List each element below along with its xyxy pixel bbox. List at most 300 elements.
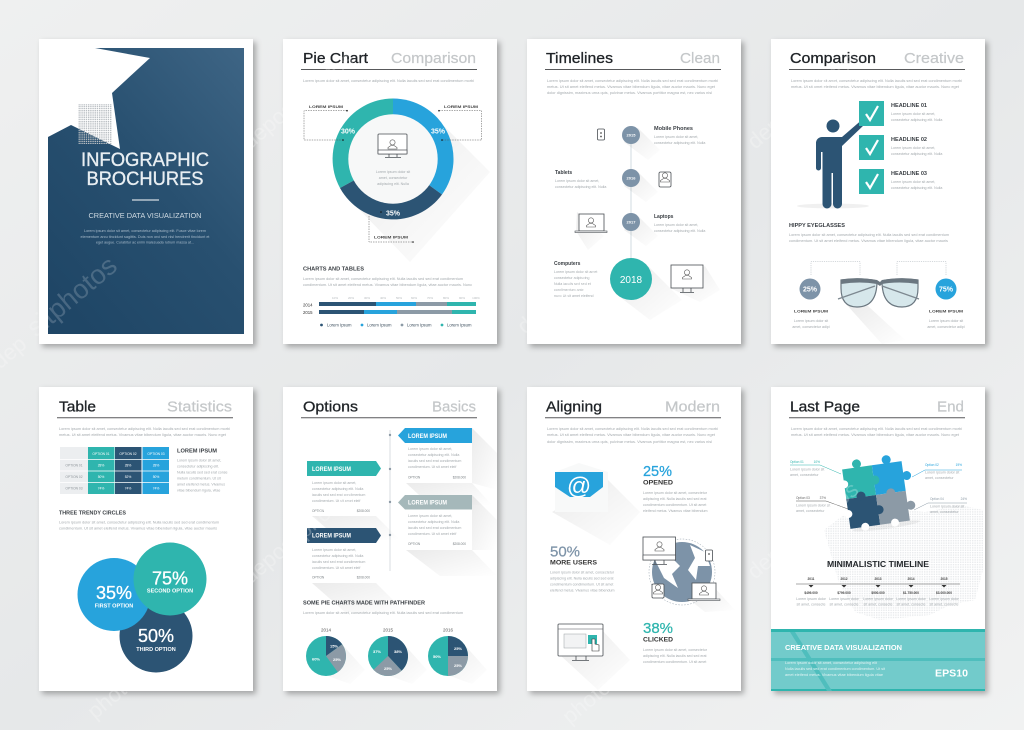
- glasses: [838, 278, 919, 344]
- stat 25 percent: Lorem ipsum dolor sit amet, consectetur: [643, 491, 708, 495]
- cover title: INFOGRAPHIC: [81, 150, 209, 171]
- stat 50 percent: Lorem ipsum dolor sit amet, consectetur: [550, 570, 615, 574]
- intro text: metus. Ut sit amet eleifend metus. Vivamus vitae bibendum ligula, vitae auctor mauris. Nunc eget: [59, 433, 226, 437]
- stat 25 percent: adipiscing elit. Nulla iaculis sed sed erat: [643, 497, 707, 501]
- label: computers: Lorem ipsum dolor sit amet: [554, 270, 597, 274]
- minimalistic timeline: $3.000.000: [936, 591, 952, 595]
- headline 01: consectetur adipiscing elit. Nulla: [891, 118, 942, 122]
- option card: gray: OPTION: [408, 542, 421, 546]
- stat 50 percent: MORE USERS: [550, 560, 598, 566]
- data table: 74%: [125, 486, 131, 490]
- circle 50 percent: 50%: [138, 626, 174, 646]
- circle 50 percent: [120, 600, 192, 672]
- option card: gray: [398, 495, 472, 550]
- label: computers: [554, 261, 597, 298]
- option card: dark: $208.000: [357, 576, 370, 580]
- minimalistic timeline: $900.000: [871, 591, 885, 595]
- stat 25 percent: OPENED: [643, 480, 673, 486]
- sub text: Lorem ipsum dolor sit amet, consectetur adipiscing elit. Nulla iaculis sed sed erat condimentum: [303, 277, 463, 281]
- pie 2015: [368, 628, 427, 684]
- option card: gray: Lorem ipsum dolor sit amet,: [408, 514, 452, 518]
- 75 percent circle: [936, 278, 956, 300]
- heading: Basics: [432, 398, 476, 416]
- heading: [301, 50, 477, 70]
- right caption: LOREM IPSUM: [929, 308, 964, 314]
- panel: timelines: [527, 39, 741, 344]
- icon: tablet: [659, 172, 671, 187]
- stat 38 percent: condimentum condimentum. Ut sit amet: [643, 660, 706, 664]
- label: tablets: Lorem ipsum dolor sit amet,: [555, 179, 599, 183]
- center rail: [389, 430, 391, 571]
- heading: [789, 398, 965, 418]
- heading: Pie Chart: [303, 50, 369, 67]
- intro text: Lorem ipsum dolor sit amet, consectetur adipiscing elit. Nulla iaculis sed sed erat condimentum morbi: [791, 427, 962, 431]
- data table: [60, 447, 169, 494]
- option card: teal: OPTION: [312, 509, 325, 513]
- side text: metum condimentum. Ut sit: [177, 476, 221, 480]
- option card: blue: consectetur adipiscing elit. Nulla: [408, 453, 459, 457]
- timeline node 2016: 2016: [627, 176, 636, 180]
- stat 50 percent: 50%: [550, 544, 580, 560]
- option card: teal: condimentum. Ut sit amet eleif: [312, 499, 360, 503]
- minimalistic timeline: Lorem ipsum dolor: [796, 597, 827, 601]
- pie 2016: [428, 628, 487, 684]
- stacked bar chart: 90%: [459, 296, 465, 300]
- icon: globe with devices: [643, 537, 735, 612]
- subheading: SOME PIE CHARTS MADE WITH PATHFINDER: [303, 600, 425, 606]
- intro text: dolor dignissim, maximus urna quis, pulvinar metus. Vivamus porttitor magna est, nec varius nisl: [547, 440, 712, 444]
- pie 2014: 15%: [330, 644, 338, 648]
- cover subtitle: CREATIVE DATA VISUALIZATION: [88, 213, 202, 220]
- pie 2014: 2014: [321, 628, 332, 632]
- banner text: Nulla iaculis sed sed erat condimentum condimentum. Ut sit: [785, 667, 885, 671]
- stacked bar chart: 100%: [472, 296, 480, 300]
- banner text: amet eleifend metus. Vivamus vitae bibendum ligula vitae: [785, 673, 883, 677]
- white star shape: [48, 48, 150, 149]
- minimalistic timeline: $499.000: [804, 591, 818, 595]
- minimalistic timeline: 2013: [874, 577, 882, 581]
- data table: OPTION 03: [65, 486, 83, 490]
- data table: OPTION 01: [92, 452, 110, 456]
- icon: email envelope: [552, 463, 640, 545]
- option card: gray: consectetur adipiscing elit. Nulla: [408, 520, 459, 524]
- option card: gray: iaculis sed sed erat condimentum: [408, 526, 461, 530]
- option card: blue: $208.000: [453, 476, 466, 480]
- option card: blue: Lorem ipsum dolor sit amet,: [408, 447, 452, 451]
- pie 2014: [306, 628, 365, 684]
- heading: [301, 398, 477, 418]
- minimalistic timeline: $799.000: [837, 591, 851, 595]
- cover title: [81, 150, 209, 190]
- heading: Timelines: [546, 50, 613, 67]
- subheading: CHARTS AND TABLES: [303, 266, 364, 272]
- checkbox 1: [859, 101, 884, 126]
- data table: 28%: [125, 464, 131, 468]
- data table: 50%: [153, 475, 159, 479]
- timeline node 2016: [622, 169, 658, 202]
- panel: aligning: [527, 387, 741, 691]
- minimalistic timeline: sit amet, consecte: [797, 602, 825, 606]
- side text: consectetur adipiscing elit.: [177, 464, 219, 468]
- intro text: metus. Ut sit amet eleifend metus. Vivamus vitae bibendum ligula, vitae auctor mauris. Nunc eget: [791, 85, 959, 89]
- label: laptops: [654, 214, 705, 233]
- icon: phone: [598, 129, 604, 140]
- option card: gray: condimentum. Ut sit amet eleif: [408, 532, 456, 536]
- stacked bar chart: 50%: [396, 296, 402, 300]
- heading: Creative: [904, 50, 964, 67]
- puzzle callouts: amet, consectetur: [796, 509, 825, 513]
- intro text: [547, 427, 718, 444]
- option card: dark: iaculis sed sed erat condimentum: [312, 560, 365, 564]
- panel: last page: [771, 387, 985, 691]
- panel: options: [283, 387, 497, 691]
- headline 02: Lorem ipsum dolor sit amet,: [891, 146, 935, 150]
- timeline heading: MINIMALISTIC TIMELINE: [827, 559, 929, 569]
- puzzle callouts: Lorem ipsum dolor sit: [930, 504, 964, 508]
- stat 38 percent: CLICKED: [643, 636, 673, 644]
- banner badge: EPS10: [935, 668, 968, 680]
- circle 75 percent: SECOND OPTION: [147, 588, 193, 594]
- label: tablets: consectetur adipiscing elit. Nulla: [555, 185, 606, 189]
- option card: dark: condimentum. Ut sit amet eleif: [312, 566, 360, 570]
- sub text: [59, 520, 219, 530]
- icon: person pointing: [797, 120, 869, 208]
- watermark: sitphotos: [21, 250, 123, 343]
- dotted world map: [824, 505, 983, 620]
- stat 25 percent: eleifend metus. Vivamus vitae bibendum: [643, 509, 707, 513]
- halftone map dots: [78, 104, 112, 144]
- option card: dark: LOREM IPSUM: [312, 534, 351, 540]
- left caption: Lorem ipsum dolor sit: [794, 319, 828, 323]
- banner text: Lorem ipsum dolor sit amet, consectetur adipiscing elit: [785, 661, 877, 665]
- side text: [177, 448, 228, 492]
- minimalistic timeline: 2011: [808, 577, 815, 581]
- watermarks: depositphotos: [237, 482, 358, 589]
- 25 percent circle: [800, 278, 820, 300]
- panel: pie chart: [283, 39, 497, 344]
- intro text: metus. Ut sit amet eleifend metus. Vivamus vitae bibendum ligula, vitae auctor mauris. Nunc eget: [547, 433, 715, 437]
- label: laptops: Lorem ipsum dolor sit amet,: [654, 223, 698, 227]
- minimalistic timeline: $1.750.000: [903, 591, 919, 595]
- stat 50 percent: condimentum condimentum. Ut sit amet: [550, 582, 613, 586]
- sub text: [789, 233, 949, 243]
- puzzle callouts: Lorem ipsum dolor sit: [796, 504, 830, 508]
- circle 75 percent: 75%: [152, 568, 188, 588]
- pie 2016: 50%: [433, 654, 441, 659]
- label: computers: Nulla iaculis sed sed et: [554, 282, 591, 286]
- pie 2016: 2016: [443, 628, 454, 632]
- option card: teal: consectetur adipiscing elit. Nulla: [312, 487, 363, 491]
- right caption: amet, consectetur adipi: [927, 325, 965, 329]
- sub text: Lorem ipsum dolor sit amet, consectetur adipiscing elit. Nulla iaculis sed sed erat condimentum: [789, 233, 949, 237]
- headline 02: [891, 137, 942, 156]
- sub text: condimentum. Ut sit amet eleifend metus. Vivamus vitae bibendum ligula, vitae auctor mauris. Nunc: [303, 283, 472, 287]
- icon: browser click: [558, 624, 630, 690]
- pie 2016: 25%: [454, 646, 462, 651]
- sub text: Lorem ipsum dolor sit amet, consectetur adipiscing elit. Nulla iaculis sed sed erat condimentum: [303, 611, 463, 615]
- option card: teal: [307, 461, 381, 516]
- heading: Options: [303, 398, 358, 416]
- intro text: [791, 79, 962, 89]
- data table: 74%: [153, 486, 159, 490]
- stacked bar chart: [303, 296, 480, 315]
- minimalistic timeline: 2015: [940, 577, 948, 581]
- intro text: Lorem ipsum dolor sit amet, consectetur adipiscing elit. Nulla iaculis sed sed erat condimentum morbi: [303, 79, 474, 83]
- watermarks: depositphotos: [512, 232, 633, 339]
- side text: Nulla iaculis sed sed erat conse: [177, 470, 228, 474]
- headline 01: HEADLINE 01: [891, 103, 927, 109]
- panel: cover: [21, 39, 253, 344]
- heading: Clean: [680, 50, 720, 67]
- chart legend: [320, 322, 472, 328]
- donut chart: Lorem ipsum dolor sit: [376, 170, 410, 174]
- heading: Comparison: [391, 50, 476, 67]
- footer banner: [771, 629, 985, 691]
- timeline node 2017: [622, 213, 658, 246]
- stacked bar chart: 60%: [411, 296, 417, 300]
- heading: Table: [59, 398, 96, 416]
- heading: [545, 398, 721, 418]
- option card: blue: OPTION: [408, 476, 421, 480]
- side text: vitae bibendum ligula, vitae: [177, 488, 220, 492]
- puzzle callouts: amet, consectetur: [925, 476, 954, 480]
- puzzle callouts: amet, consectetur: [930, 510, 959, 514]
- heading: [57, 398, 233, 418]
- option card: teal: LOREM IPSUM: [312, 467, 351, 473]
- intro text: Lorem ipsum dolor sit amet, consectetur adipiscing elit. Nulla iaculis sed sed erat condimentum morbi: [791, 79, 962, 83]
- stacked bar chart: 2014: [303, 302, 313, 308]
- option card: teal: iaculis sed sed erat condimentum: [312, 493, 365, 497]
- intro text: metus. Ut sit amet eleifend metus. Vivamus vitae bibendum ligula, vitae auctor mauris. Nunc eget: [791, 433, 959, 437]
- dashed callouts: LOREM IPSUM: [309, 104, 344, 109]
- data table: 74%: [98, 486, 104, 490]
- option card: dark: OPTION: [312, 576, 325, 580]
- puzzle callouts: Option 01: [790, 460, 804, 464]
- heading: [545, 50, 721, 70]
- icon: laptop: [575, 212, 607, 250]
- monitor icon: [378, 134, 407, 158]
- heading: Modern: [665, 398, 720, 416]
- stat 38 percent: adipiscing elit. Nulla iaculis sed sed erat: [643, 654, 707, 658]
- puzzle callouts: 37%: [820, 496, 826, 500]
- data table: 52%: [125, 475, 131, 479]
- side text: Lorem ipsum dolor sit amet,: [177, 458, 221, 462]
- puzzle graphic: [837, 452, 920, 534]
- minimalistic timeline: 2014: [907, 577, 915, 581]
- timeline node 2015: 2015: [627, 132, 636, 138]
- stacked bar chart: 30%: [364, 296, 370, 300]
- watermarks: [0, 47, 863, 729]
- left caption: amet, consectetur adipi: [792, 325, 830, 329]
- heading: Last Page: [790, 398, 860, 416]
- label: laptops: consectetur adipiscing elit. Nulla: [654, 229, 705, 233]
- label: mobile phones: Lorem ipsum dolor sit amet,: [654, 135, 698, 139]
- puzzle callouts: 10%: [814, 460, 820, 464]
- label: computers: consectetur adipiscing: [554, 276, 590, 280]
- option card: blue: iaculis sed sed erat condimentum: [408, 459, 461, 463]
- sub text: [303, 277, 472, 287]
- left caption: LOREM IPSUM: [794, 308, 829, 314]
- option card: teal: $208.000: [357, 509, 370, 513]
- right caption: [927, 308, 965, 329]
- cover title: BROCHURES: [86, 169, 204, 190]
- side text: LOREM IPSUM: [177, 448, 218, 454]
- option card: dark: Lorem ipsum dolor sit amet,: [312, 548, 356, 552]
- watermarks: photos: [557, 667, 624, 729]
- panel: comparison: [771, 39, 985, 344]
- stat 25 percent: 25%: [643, 463, 672, 480]
- heading: Statistics: [167, 398, 232, 416]
- puzzle callouts: Option 03: [796, 496, 810, 500]
- headline 02: consectetur adipiscing elit. Nulla: [891, 152, 942, 156]
- donut chart: adipiscing elit. Nulla: [377, 182, 409, 186]
- puzzle callouts: Lorem ipsum dolor sit: [925, 470, 959, 474]
- intro text: Lorem ipsum dolor sit amet, consectetur adipiscing elit. Nulla iaculis sed sed erat condimentum morbi: [547, 79, 718, 83]
- minimalistic timeline: Lorem ipsum dolor: [929, 597, 960, 601]
- donut chart: 35%: [431, 128, 446, 136]
- sub text: Lorem ipsum dolor sit amet, consectetur adipiscing elit. Nulla iaculis sed sed erat condimentum: [59, 520, 219, 524]
- option card: blue: [398, 428, 472, 483]
- chart legend: Lorem Ipsum: [447, 322, 472, 328]
- pie 2015: 37%: [373, 649, 381, 654]
- data table: OPTION 03: [147, 452, 165, 456]
- stat 50 percent: eleifend metus. Vivamus vitae bibendum: [550, 588, 614, 592]
- label: computers: nunc Ut sit amet eleifend: [554, 294, 594, 298]
- pie 2015: 25%: [384, 666, 392, 671]
- stacked bar chart: 80%: [443, 296, 449, 300]
- minimalistic timeline: Lorem ipsum dolor: [896, 597, 927, 601]
- left caption: [792, 308, 830, 329]
- cover paragraph: Lorem ipsum dolor sit amet, consectetur adipiscing elit. Fusce vitae lorem: [84, 229, 206, 233]
- donut chart: 35%: [386, 210, 401, 218]
- cover paragraph: eget augue. Curabitur ac enim malesuada rutrum massa at...: [96, 240, 194, 244]
- intro text: dolor dignissim, maximus urna quis, pulvinar metus. Vivamus porttitor magna est, nec varius nisl: [547, 91, 712, 95]
- minimalistic timeline: sit amet, consecte: [864, 602, 892, 606]
- minimalistic timeline: [796, 577, 960, 606]
- stat 38 percent: 38%: [643, 620, 673, 637]
- watermarks: depositphotos: [237, 47, 358, 154]
- puzzle callouts: 19%: [956, 463, 962, 467]
- puzzle callouts: amet, consectetur: [790, 473, 819, 477]
- label: mobile phones: Mobile Phones: [654, 126, 693, 132]
- pie 2015: 2015: [383, 628, 394, 632]
- headline 03: [891, 171, 942, 190]
- headline 01: [891, 103, 942, 122]
- option card: gray: LOREM IPSUM: [408, 500, 447, 506]
- heading: Aligning: [546, 398, 602, 416]
- minimalistic timeline: Lorem ipsum dolor: [863, 597, 894, 601]
- stacked bar chart: 40%: [380, 296, 386, 300]
- dashed callouts: LOREM IPSUM: [374, 234, 409, 240]
- chart legend: Lorem Ipsum: [367, 322, 392, 328]
- dashed callouts: [304, 104, 482, 243]
- stat 38 percent: Lorem ipsum dolor sit amet, consectetur: [643, 648, 708, 652]
- intro text: Lorem ipsum dolor sit amet, consectetur adipiscing elit. Nulla iaculis sed sed erat condimentum morbi: [59, 427, 230, 431]
- subheading: HIPPY EYEGLASSES: [789, 223, 845, 229]
- subheading: THREE TRENDY CIRCLES: [59, 510, 126, 516]
- headline 02: HEADLINE 02: [891, 137, 927, 143]
- stacked bar chart: 20%: [348, 296, 354, 300]
- donut chart: 30%: [341, 128, 356, 136]
- headline 03: Lorem ipsum dolor sit amet,: [891, 180, 935, 184]
- label: mobile phones: [654, 126, 705, 145]
- option card: dark: [307, 528, 381, 583]
- three overlapping circles: [78, 542, 206, 672]
- chart legend: Lorem Ipsum: [327, 322, 352, 328]
- label: computers: condimentum ante: [554, 288, 584, 292]
- intro text: [59, 427, 230, 437]
- label: tablets: Tablets: [555, 170, 572, 176]
- donut chart: amet, consectetur: [379, 176, 408, 180]
- label: tablets: [555, 170, 606, 189]
- checkbox 2: [859, 135, 884, 160]
- option card: blue: LOREM IPSUM: [408, 434, 447, 440]
- option card: teal: Lorem ipsum dolor sit amet,: [312, 481, 356, 485]
- pie 2014: 25%: [333, 657, 341, 662]
- watermarks: depositphotos: [742, 47, 863, 154]
- option card: gray: $208.000: [453, 542, 466, 546]
- stat 25 percent: [643, 463, 708, 513]
- option card: blue: condimentum. Ut sit amet eleif: [408, 465, 456, 469]
- stat 50 percent: [550, 544, 615, 592]
- stacked bar chart: 10%: [332, 296, 338, 300]
- minimalistic timeline: sit amet, consecte: [930, 602, 958, 606]
- headline 01: Lorem ipsum dolor sit amet,: [891, 112, 935, 116]
- circle 35 percent: [78, 558, 150, 631]
- puzzle callouts: Option 02: [925, 463, 939, 467]
- dashed connectors: [811, 262, 946, 275]
- cover paragraph: elementum arcu tincidunt sagittis. Duis non orci sed nisl hendrerit tincidunt et: [80, 235, 210, 239]
- data table: OPTION 02: [119, 452, 137, 456]
- banner title: CREATIVE DATA VISUALIZATION: [785, 645, 902, 652]
- minimalistic timeline: Lorem ipsum dolor: [829, 597, 860, 601]
- sub text: condimentum. Ut sit amet eleifend metus. Vivamus vitae bibendum ligula, vitae auctor mauris: [789, 239, 948, 243]
- long shadows: [312, 428, 497, 612]
- panel: table: [39, 387, 253, 691]
- circle 75 percent: [134, 542, 206, 616]
- stacked bar chart: 70%: [427, 296, 433, 300]
- puzzle callouts: 24%: [961, 497, 967, 501]
- data table: OPTION 01: [65, 464, 83, 468]
- puzzle callouts: Lorem ipsum dolor sit: [790, 468, 824, 472]
- puzzle callouts: Option 04: [930, 497, 944, 501]
- icon: monitor: [670, 265, 720, 302]
- puzzle callouts: [790, 460, 967, 514]
- intro text: Lorem ipsum dolor sit amet, consectetur adipiscing elit. Nulla iaculis sed sed erat condimentum morbi: [547, 427, 718, 431]
- headline 03: consectetur adipiscing elit. Nulla: [891, 186, 942, 190]
- heading: [789, 50, 965, 70]
- headline 03: HEADLINE 03: [891, 171, 927, 177]
- 25 percent circle: 25%: [803, 286, 818, 294]
- cover paragraph: [80, 229, 210, 244]
- side text: amet eleifend metus. Vivamus: [177, 482, 225, 486]
- minimalistic timeline: sit amet, consecte: [897, 602, 925, 606]
- sub text: condimentum. Ut sit amet eleifend metus. Vivamus vitae bibendum ligula, vitae auctor mauris: [59, 526, 217, 530]
- minimalistic timeline: sit amet, consecte: [830, 602, 858, 606]
- timeline node 2018: 2018: [620, 275, 643, 286]
- data table: 28%: [153, 464, 159, 468]
- intro text: [791, 427, 962, 437]
- stacked bar chart: 2015: [303, 310, 313, 315]
- chart legend: Lorem Ipsum: [407, 322, 432, 328]
- heading: End: [937, 398, 964, 416]
- watermarks: depositphotos: [742, 477, 863, 584]
- icon: email envelope: @: [567, 473, 591, 500]
- donut chart: [333, 98, 490, 262]
- stat 50 percent: adipiscing elit. Nulla iaculis sed sed erat: [550, 576, 614, 580]
- dashed callouts: LOREM IPSUM: [444, 104, 479, 109]
- heading: Comparison: [790, 50, 876, 67]
